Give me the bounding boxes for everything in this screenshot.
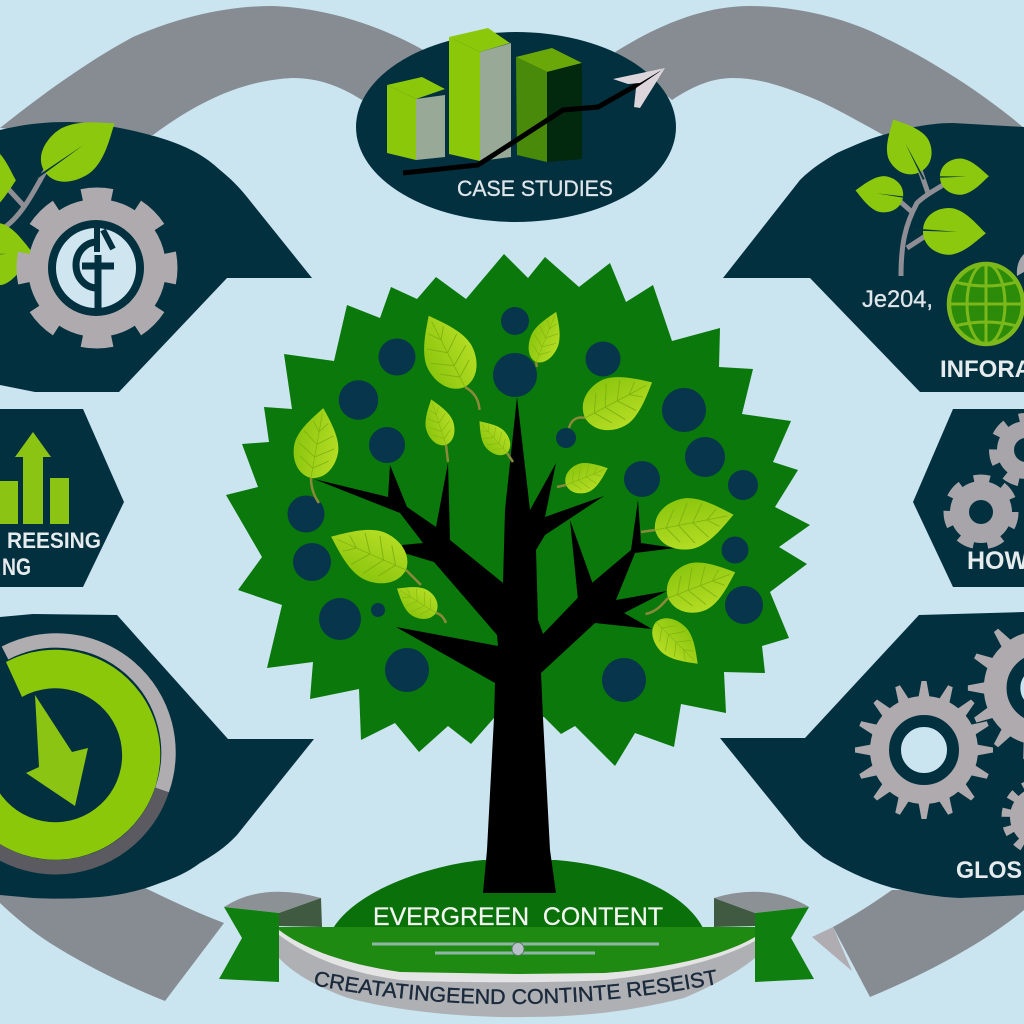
tree trunk and branches bbox=[314, 397, 675, 893]
arrow: top left arch bbox=[0, 6, 427, 135]
icon: 3D bar chart bbox=[387, 28, 582, 162]
icon: globe bbox=[949, 264, 1023, 344]
tree leaves bbox=[289, 304, 744, 676]
tree fruit dots bbox=[288, 307, 763, 702]
subtitle: CREATATINGEEND CONTINTE RESEIST bbox=[315, 969, 716, 1004]
slider divider bbox=[372, 942, 659, 956]
banner white edge bbox=[279, 927, 755, 982]
icon: gear with emblem bbox=[24, 195, 170, 341]
icon: gears bbox=[855, 626, 1024, 850]
banner ribbon bbox=[219, 860, 814, 1018]
panel: middle right bbox=[913, 409, 1024, 587]
ground mound bbox=[332, 860, 704, 930]
arrow: trend line bbox=[403, 68, 665, 173]
icon: rising bars and arrow bbox=[0, 432, 69, 524]
label: glossary: GLOS bbox=[956, 857, 1022, 884]
label: case studies: CASE STUDIES bbox=[457, 176, 613, 201]
panel: bottom left bbox=[0, 614, 314, 899]
panel: middle left bbox=[0, 409, 124, 587]
label: date: Je204, bbox=[862, 286, 933, 313]
tree bbox=[226, 254, 810, 893]
arrow: top right arch bbox=[615, 6, 1024, 137]
banner grey band bbox=[279, 933, 755, 1017]
arrow: bottom right arch bbox=[812, 890, 1024, 997]
panel: top left bbox=[0, 102, 312, 392]
arrow: bottom left arch bbox=[0, 887, 224, 1001]
leaf stems bbox=[311, 362, 668, 623]
banner green top bbox=[279, 927, 755, 974]
label: increasing traffic bbox=[2, 528, 101, 581]
panel: top right bbox=[723, 109, 1024, 392]
icon: plant sprig bbox=[0, 102, 130, 286]
panel: case studies bbox=[356, 28, 676, 222]
icon: grey leaf bbox=[1017, 254, 1024, 276]
icon: gears bbox=[948, 418, 1024, 546]
icon: circular refresh arrow bbox=[0, 640, 168, 867]
ribbon left tail bbox=[219, 892, 322, 982]
title: EVERGREEN CONTENT bbox=[373, 903, 663, 931]
icon: plant sprig bbox=[853, 109, 989, 276]
ribbon right tail bbox=[714, 892, 814, 982]
tree crown bbox=[226, 254, 810, 766]
panel: bottom right bbox=[720, 612, 1024, 898]
label: increasing traffic: REESING bbox=[7, 528, 101, 553]
label: increasing traffic: NG bbox=[2, 554, 31, 581]
